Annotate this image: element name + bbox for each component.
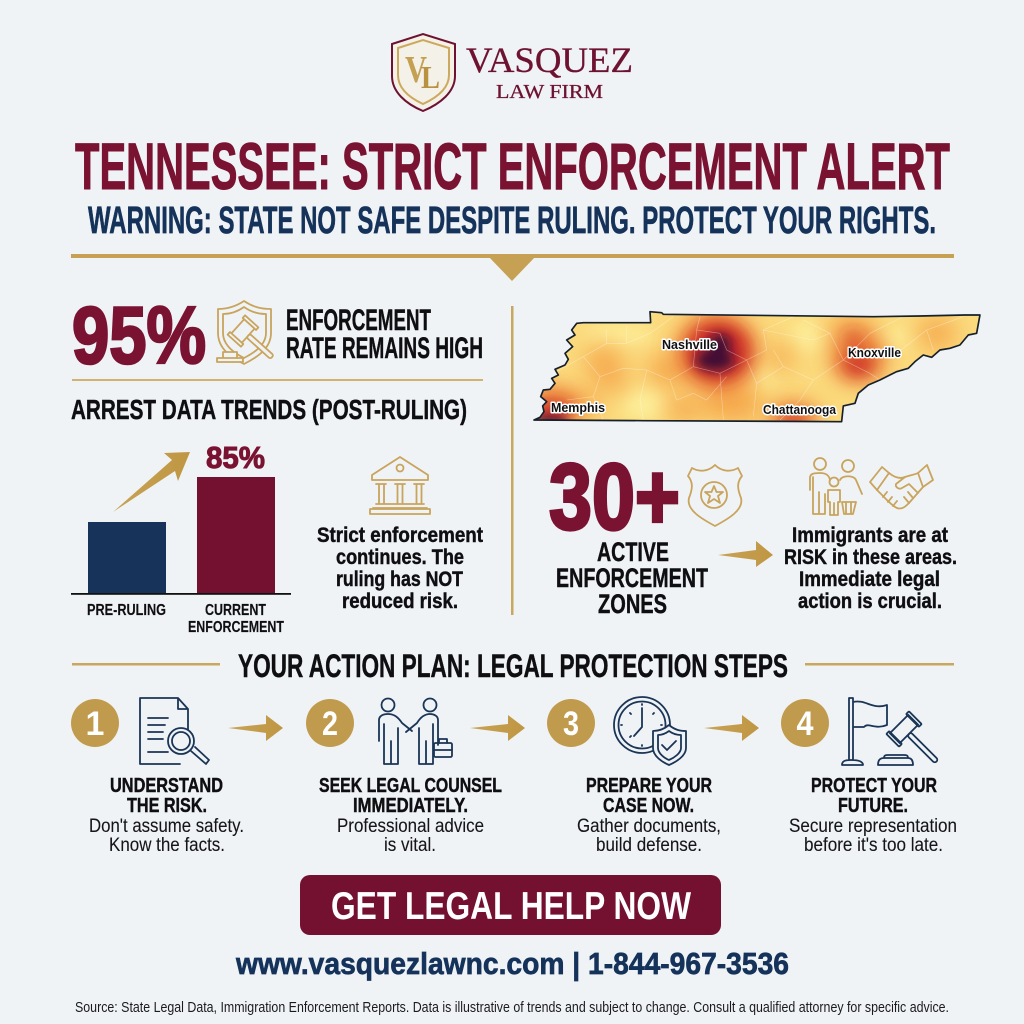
step description: [789, 816, 957, 856]
arrow: step 1 to 2: [228, 715, 283, 741]
step description: Professional advice: [337, 816, 484, 837]
axis label: current enforcement: CURRENT: [205, 602, 266, 619]
text: immigrants at risk: Immediate legal: [799, 568, 940, 591]
step heading: IMMEDIATELY.: [353, 795, 468, 817]
arrow: zones to risk: [718, 541, 773, 567]
text: strict enforcement note: Strict enforcement: [317, 524, 483, 547]
stat: 30+: 30+: [549, 444, 680, 549]
step heading: [110, 775, 223, 817]
action plan heading: YOUR ACTION PLAN: LEGAL PROTECTION STEPS: [238, 648, 788, 684]
panel: arrest data trends: [71, 394, 483, 636]
step description: [577, 816, 721, 856]
panel: active enforcement zones: [549, 444, 957, 619]
logo shield: L: [421, 59, 440, 95]
text: immigrants at risk: RISK in these areas.: [784, 546, 957, 569]
step description: before it's too late.: [804, 835, 943, 856]
map label: Memphis: Memphis: [551, 400, 605, 415]
logo: [392, 34, 633, 111]
text: strict enforcement note: [317, 524, 483, 613]
step description: [89, 816, 244, 856]
text: immigrants at risk: [784, 524, 957, 613]
step number: 3: [563, 705, 579, 743]
step description: build defense.: [596, 835, 702, 856]
call to action button: GET LEGAL HELP NOW: [331, 885, 691, 928]
contact details: www.vasquezlawnc.com | 1-844-967-3536: [235, 946, 789, 981]
step description: is vital.: [384, 835, 436, 856]
step description: Secure representation: [789, 816, 957, 837]
zones label: ACTIVE: [597, 537, 669, 567]
step heading: CASE NOW.: [603, 795, 694, 817]
stat: 95%: 95%: [72, 291, 206, 381]
icon: handshake: [870, 465, 933, 509]
arrow: step 2 to 3: [470, 715, 525, 741]
step description: Don't assume safety.: [89, 816, 244, 837]
logo shield: V: [405, 49, 427, 91]
bar: current enforcement: [197, 477, 275, 593]
map label: Knoxville: Knoxville: [848, 345, 901, 360]
bar chart: [71, 440, 291, 636]
icon: family: [810, 458, 862, 515]
logo subline: LAW FIRM: [496, 81, 603, 103]
panel: enforcement rate: [72, 291, 483, 381]
text: strict enforcement note: continues. The: [336, 546, 464, 569]
step heading: SEEK LEGAL COUNSEL: [319, 775, 502, 797]
step number: 1: [86, 705, 104, 743]
axis label: current enforcement: ENFORCEMENT: [188, 619, 284, 636]
value label: 85%: [206, 440, 265, 475]
step number: [547, 699, 595, 747]
icon: courthouse: [370, 457, 430, 514]
icon: handshake between two people: [379, 698, 452, 764]
step 4: [781, 698, 957, 856]
step description: Gather documents,: [577, 816, 721, 837]
step number: 4: [796, 705, 814, 743]
axis label: pre-ruling: PRE-RULING: [87, 602, 166, 619]
rate label line 1: ENFORCEMENT: [286, 304, 431, 337]
section heading: ARREST DATA TRENDS (POST-RULING): [71, 394, 467, 425]
step 2: [306, 698, 502, 856]
arrow: step 3 to 4: [704, 715, 759, 741]
zones label: [556, 537, 708, 619]
step heading: [586, 775, 712, 817]
step heading: UNDERSTAND: [110, 775, 223, 797]
step number: 2: [322, 705, 338, 743]
map label: Chattanooga: Chattanooga: [763, 402, 837, 417]
step 1: [71, 698, 244, 856]
text: immigrants at risk: Immigrants are at: [792, 524, 948, 547]
step heading: FUTURE.: [838, 795, 908, 817]
map: Tennessee heat map: [533, 310, 981, 422]
zones label: ENFORCEMENT: [556, 563, 708, 593]
step description: [337, 816, 484, 856]
step number: [71, 699, 119, 747]
icon: police badge: [688, 465, 742, 526]
text: strict enforcement note: ruling has NOT: [336, 568, 463, 591]
icon: clock and shield: [614, 697, 686, 765]
step heading: THE RISK.: [127, 795, 207, 817]
step heading: [811, 775, 937, 817]
text: immigrants at risk: action is crucial.: [798, 590, 942, 613]
icon: document and magnifier: [140, 698, 209, 764]
zones label: ZONES: [598, 589, 667, 619]
map label: Nashville: Nashville: [662, 337, 717, 352]
text: strict enforcement note: reduced risk.: [342, 590, 458, 613]
bar: pre-ruling: [88, 522, 166, 593]
step description: Know the facts.: [109, 835, 225, 856]
arrow: rising trend: [113, 452, 190, 512]
icon: shield and gavel: [217, 301, 281, 367]
step heading: [319, 775, 502, 817]
axis label: current enforcement: [188, 602, 284, 636]
step number: [781, 699, 829, 747]
header divider with pointer: [71, 254, 954, 281]
logo firm name: VASQUEZ: [466, 40, 633, 80]
logo shield: [392, 34, 455, 111]
step 3: [547, 697, 721, 856]
icon: flag and gavel: [842, 698, 948, 773]
step heading: PREPARE YOUR: [586, 775, 712, 797]
step number: [306, 699, 354, 747]
step heading: PROTECT YOUR: [811, 775, 937, 797]
call to action button: [300, 875, 721, 935]
rate label line 2: RATE REMAINS HIGH: [286, 332, 483, 365]
